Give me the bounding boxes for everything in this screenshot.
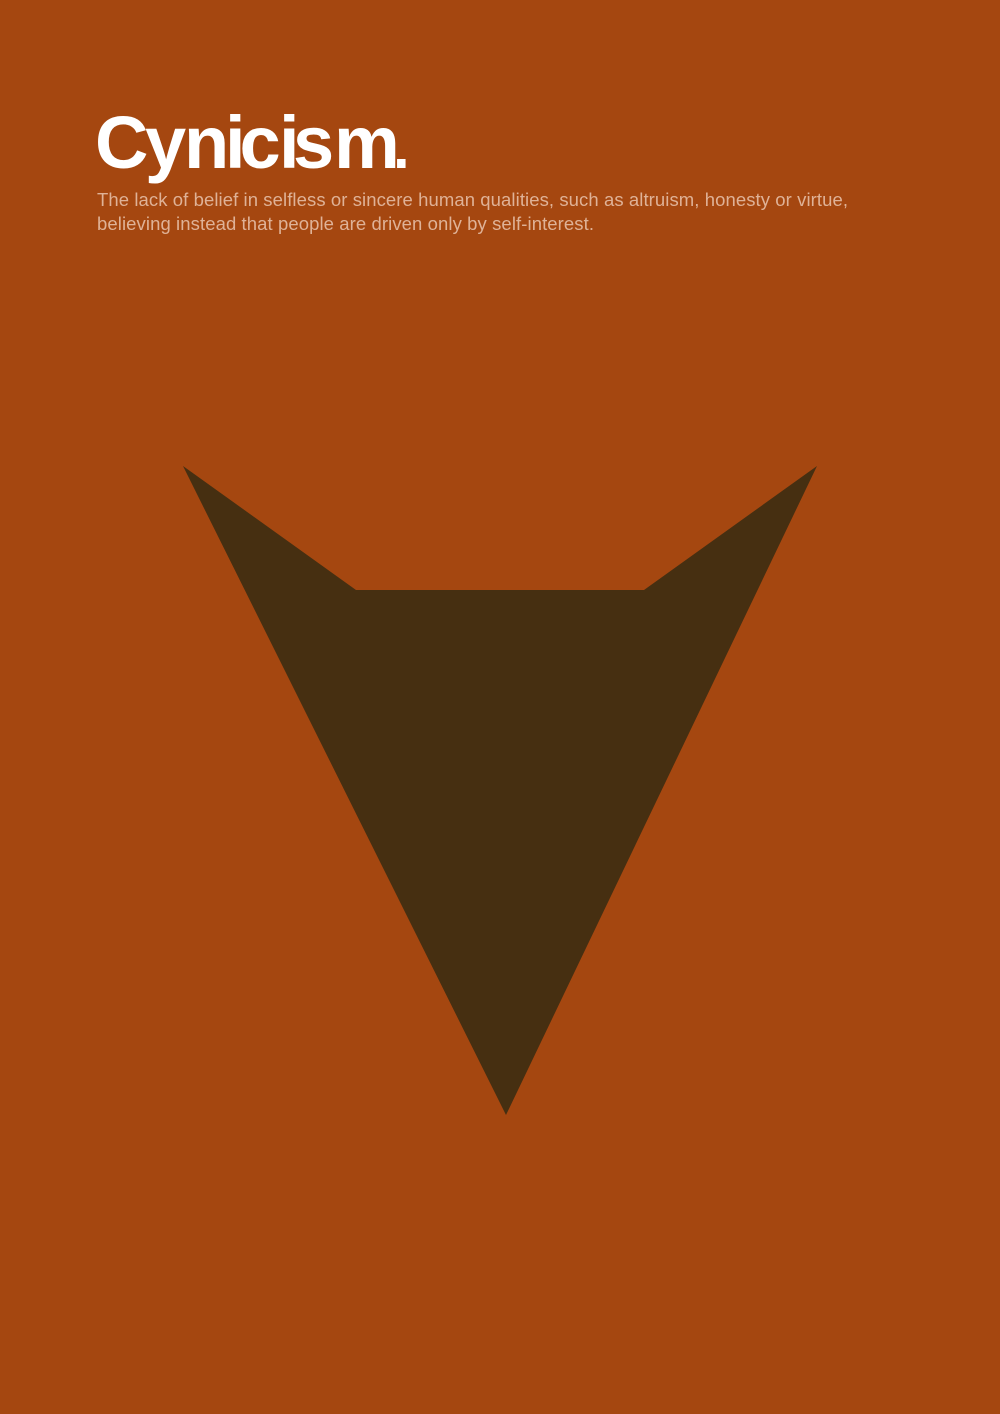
title: .	[393, 114, 410, 181]
description text: The lack of belief in selfless or sincere human qualities, such as altruism, honesty or virtue,	[97, 189, 848, 210]
icon: fox head silhouette	[183, 466, 817, 1115]
description text	[97, 189, 848, 234]
description text: believing instead that people are driven only by self-interest.	[97, 213, 594, 234]
title: Cynicism	[95, 101, 400, 184]
